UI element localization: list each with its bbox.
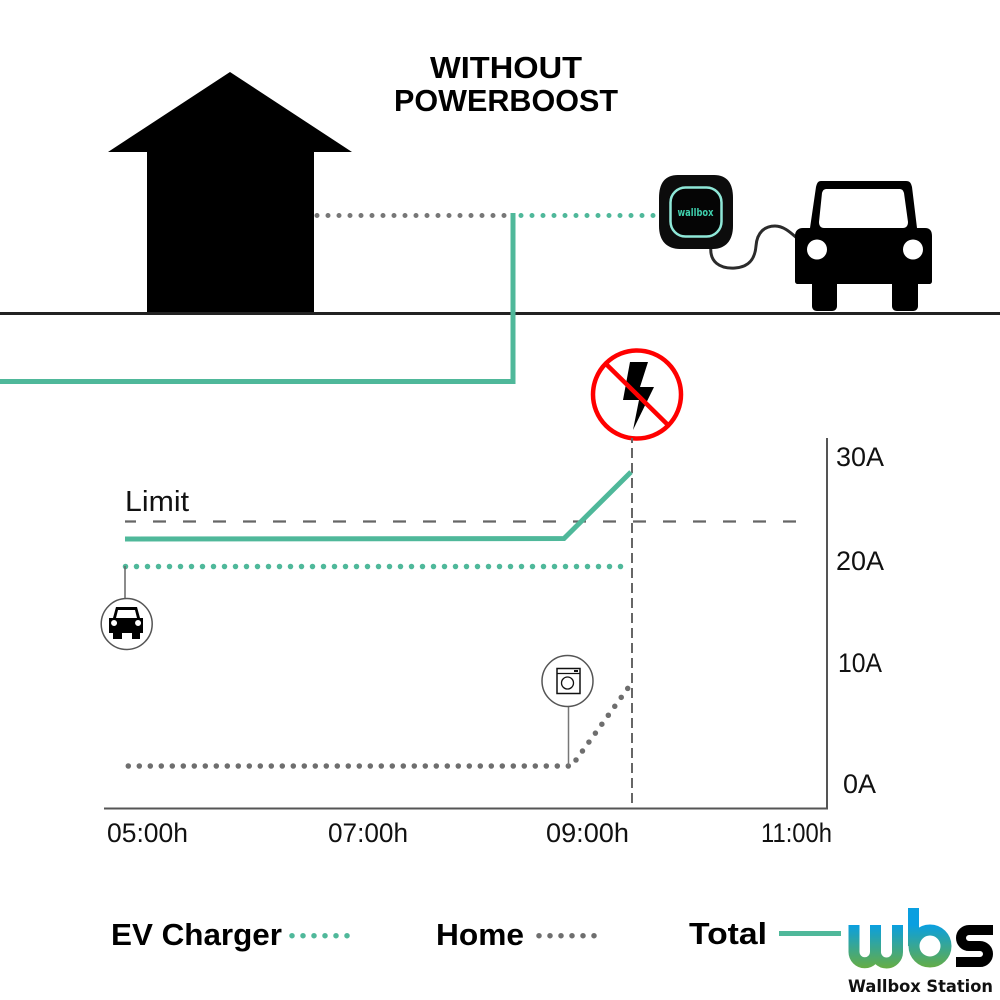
grid supply line <box>0 213 513 382</box>
title <box>394 50 618 118</box>
logo: wbs: Wallbox Station <box>848 977 993 997</box>
limit label: Limit <box>125 486 189 518</box>
x axis labels: 05:00h <box>107 818 188 848</box>
legend: home: Home <box>436 917 524 952</box>
logo: wbs <box>848 908 993 997</box>
ground line <box>0 312 1000 315</box>
chart axes <box>104 438 827 808</box>
y axis labels <box>836 442 884 799</box>
legend: EV charger: EV Charger <box>111 917 282 952</box>
home connection dotted line <box>317 213 510 218</box>
icon: car <box>795 181 932 311</box>
icon: house <box>108 72 352 313</box>
title: WITHOUT <box>430 50 582 85</box>
legend: total: Total <box>689 916 767 951</box>
y axis labels: 20A <box>836 546 884 576</box>
charger connection dotted line <box>521 213 655 218</box>
home dotted line <box>128 688 628 766</box>
x axis labels: 11:00h <box>761 818 832 848</box>
y axis labels: 0A <box>843 769 876 799</box>
icon: no power warning <box>593 350 681 438</box>
total current line <box>125 472 631 539</box>
limit dashed line <box>125 520 797 523</box>
x axis labels: 09:00h <box>546 818 629 848</box>
y axis labels: 10A <box>838 648 882 678</box>
title: POWERBOOST <box>394 83 618 118</box>
icon: wallbox charger: wallbox <box>678 206 714 219</box>
current time dashed line <box>631 438 633 808</box>
x axis labels: 07:00h <box>328 818 408 848</box>
washing machine marker <box>542 656 593 766</box>
x axis labels <box>107 818 832 848</box>
y axis labels: 30A <box>836 442 884 472</box>
car marker <box>101 566 152 650</box>
EV charger dotted line <box>126 564 626 569</box>
icon: wallbox charger <box>659 175 798 268</box>
